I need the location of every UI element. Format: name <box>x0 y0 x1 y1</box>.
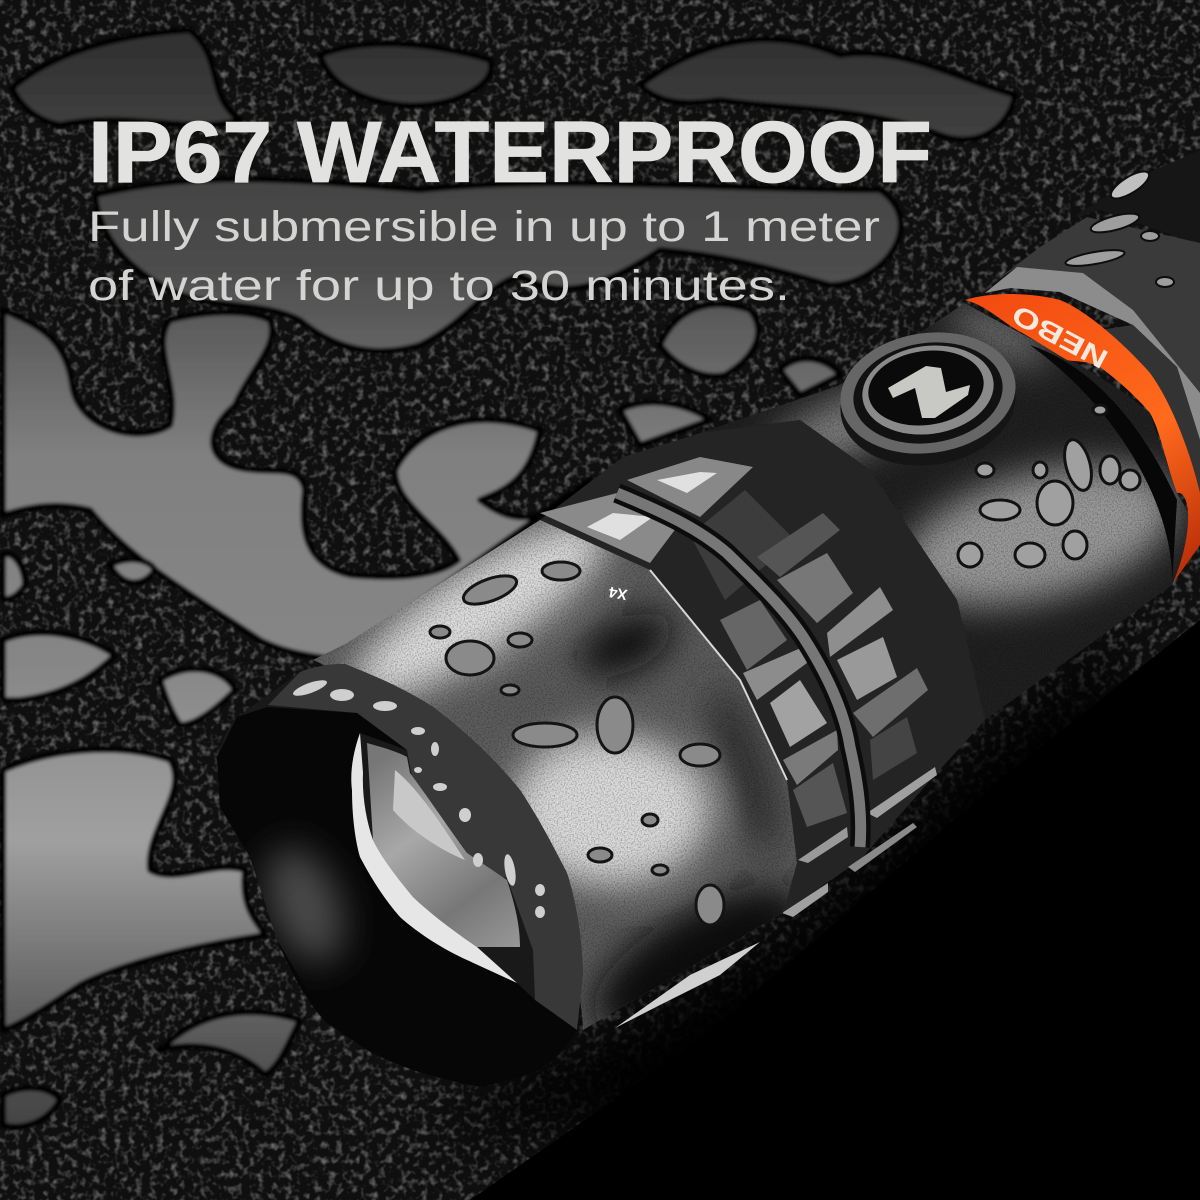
subtext: Fully submersible in up to 1 meter <box>88 203 880 251</box>
water droplets on barrel <box>430 562 724 925</box>
hollow interior <box>217 707 577 1087</box>
seam highlight <box>650 570 787 780</box>
rear barrel <box>997 217 1200 400</box>
ring window panels <box>540 493 680 563</box>
barrel <box>300 493 829 1063</box>
lens highlight <box>393 770 465 860</box>
ring panels <box>720 553 917 827</box>
lens white crescent <box>351 733 517 983</box>
deep shadow under flashlight <box>420 590 1200 1200</box>
water droplets on main body <box>958 405 1140 567</box>
orange ring <box>965 294 1200 583</box>
light streak on lower body <box>615 942 760 1028</box>
body highlights <box>761 292 1191 631</box>
water droplets on rear barrel <box>1064 167 1174 287</box>
subtext <box>88 203 880 310</box>
main body <box>702 303 1188 720</box>
centre band <box>617 493 861 847</box>
rim droplets <box>291 677 545 918</box>
dark gap beside orange ring <box>1030 345 1177 585</box>
focus ring <box>540 420 985 917</box>
ring ribs <box>743 513 937 917</box>
rear cap <box>1073 150 1200 245</box>
power button <box>832 321 1024 477</box>
water puddles <box>3 30 1015 1127</box>
N logo <box>888 366 970 418</box>
side panel past orange ring <box>1100 325 1200 500</box>
bezel <box>217 664 583 1087</box>
barrel marking: X4 <box>607 583 629 603</box>
title: IP67 WATERPROOF <box>88 104 932 201</box>
flashlight <box>217 150 1200 1087</box>
interior lit patch <box>251 837 359 973</box>
lens glass <box>367 743 520 947</box>
bezel top speckled rim <box>268 664 583 1030</box>
ring label: NEBO <box>1007 299 1113 374</box>
knurled collar <box>985 267 1200 440</box>
subtext: of water for up to 30 minutes. <box>88 262 790 310</box>
